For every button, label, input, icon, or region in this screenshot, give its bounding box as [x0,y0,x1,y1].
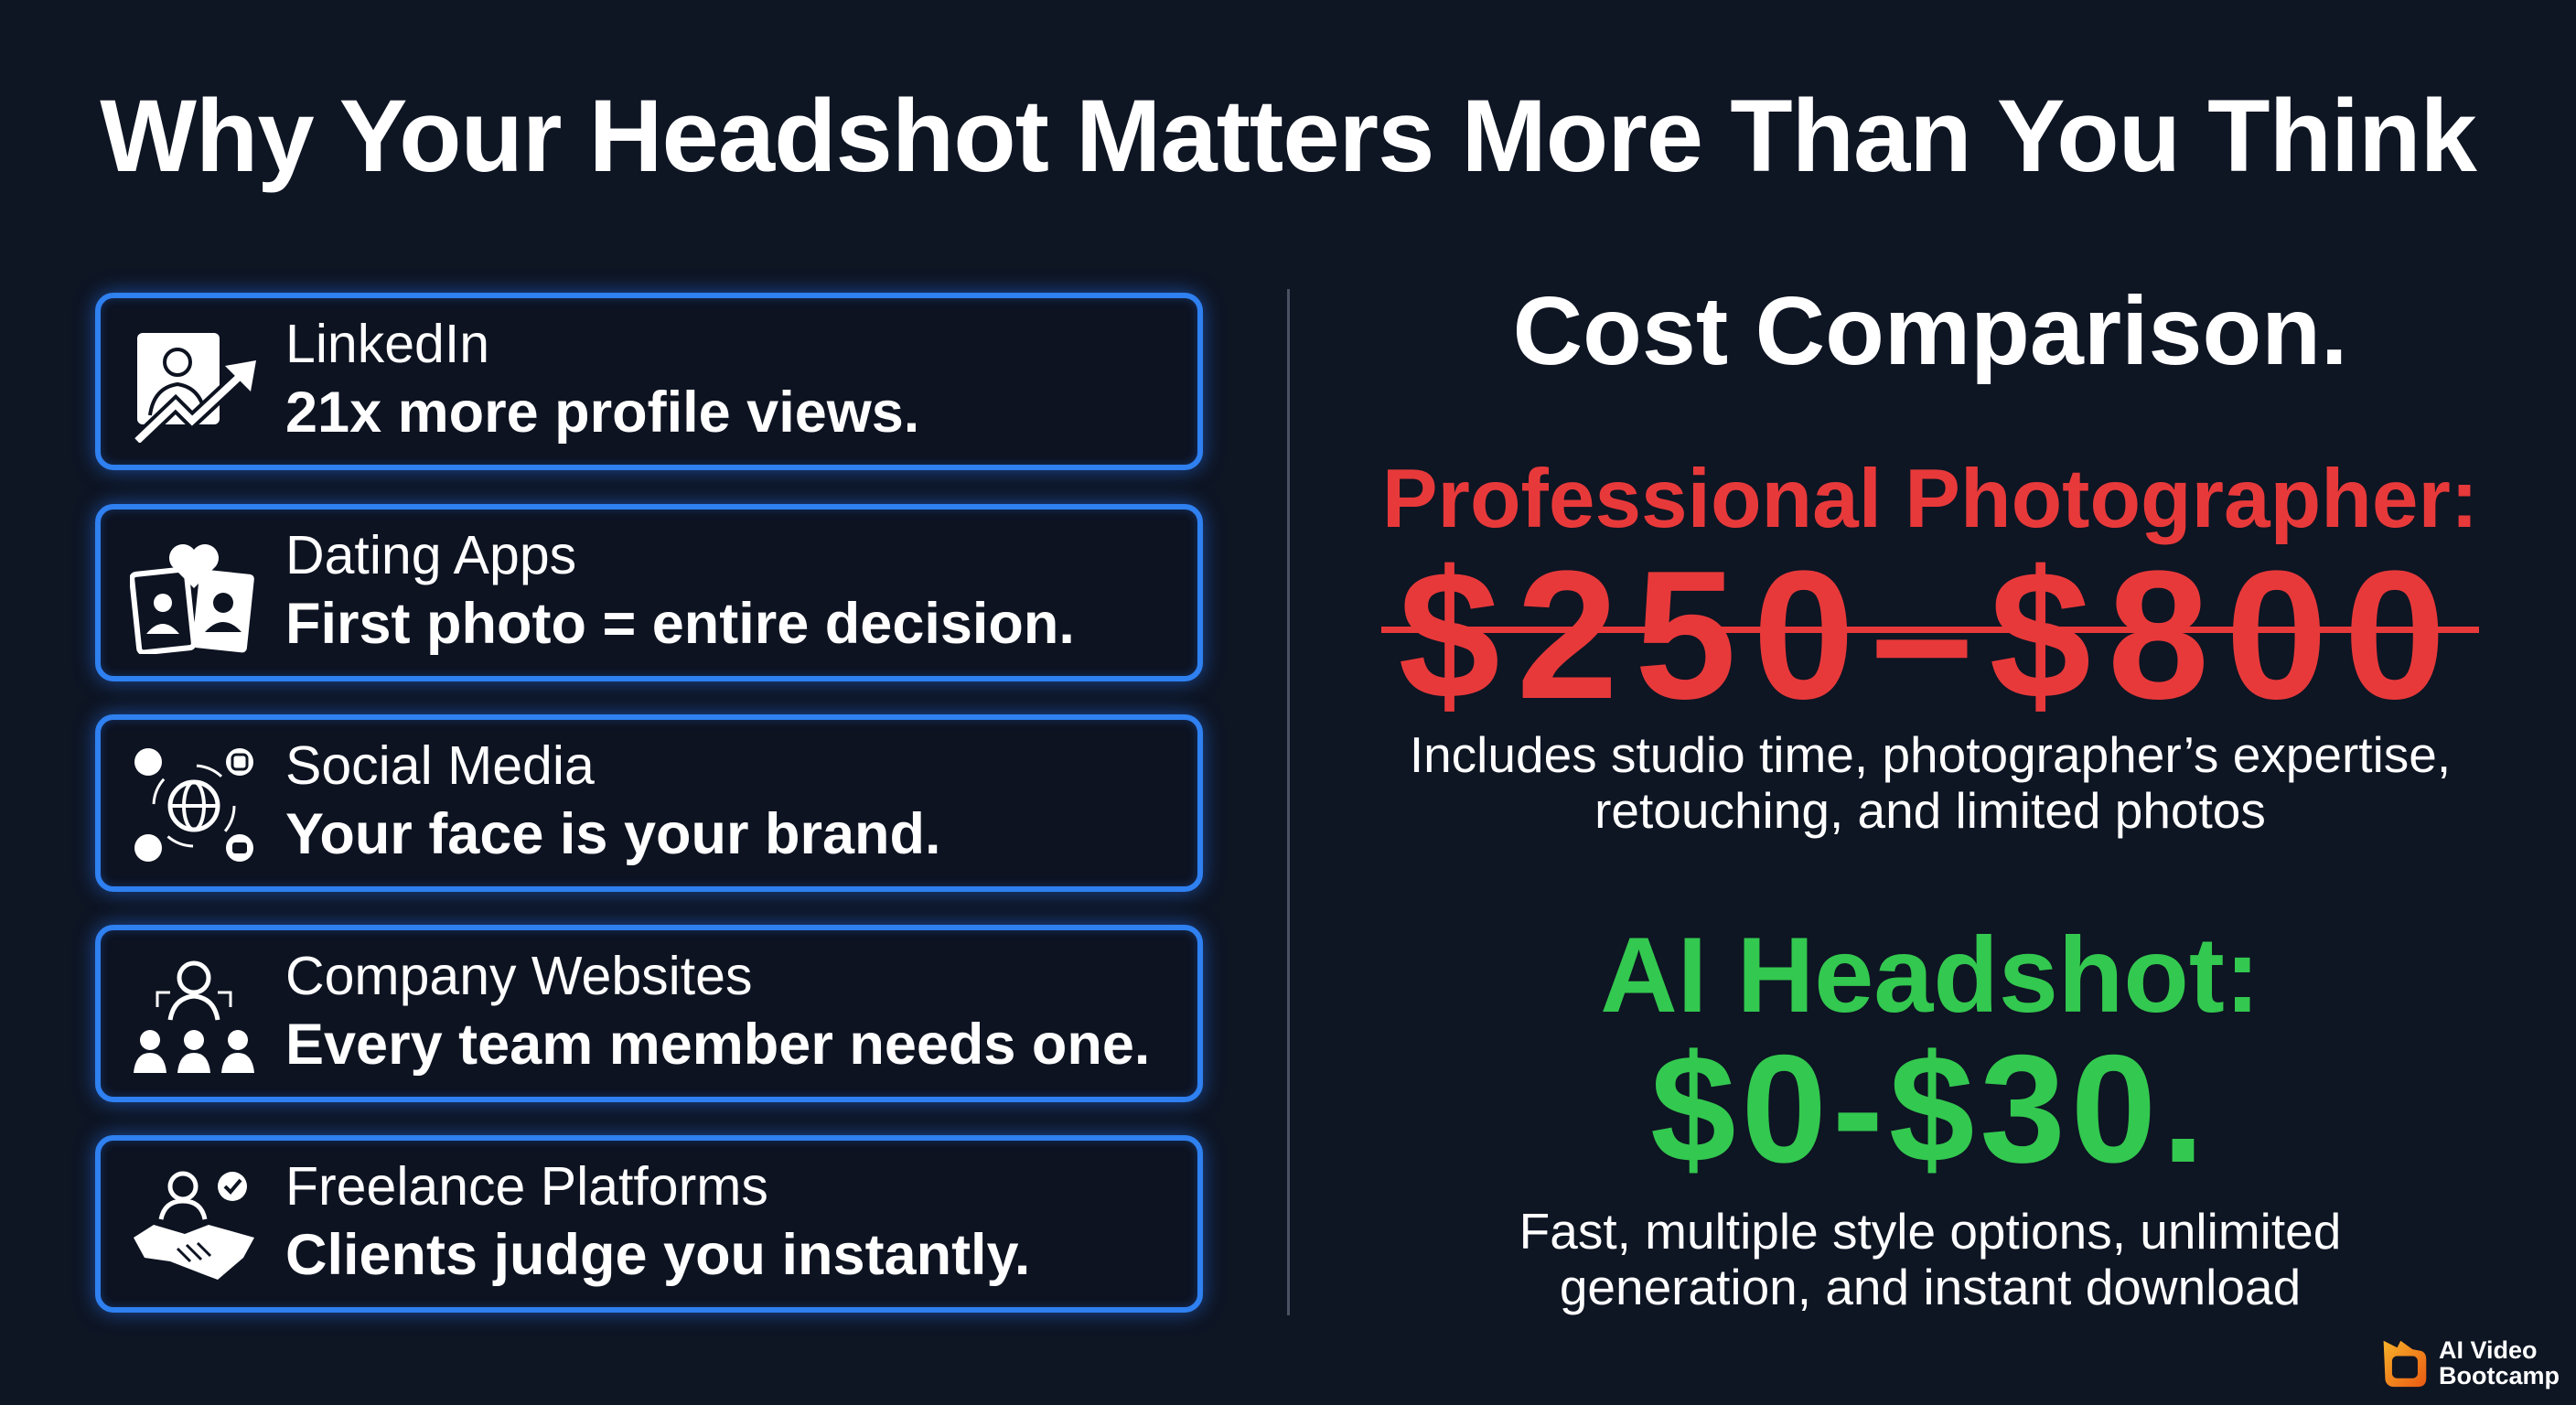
card: Freelance Platforms [95,1135,1203,1313]
card: LinkedIn: LinkedIn [285,314,489,374]
card: Dating Apps: First photo = entire decision. [285,592,1075,656]
price: struck through: $250–$800 [1398,533,2463,737]
icon: team [134,960,254,1073]
text: AI benefits: generation, and instant download [1560,1259,2301,1315]
text: AI benefits [1519,1203,2341,1315]
card: Dating Apps [95,504,1203,681]
text: photographer includes [1410,726,2451,839]
card: Dating Apps: Dating Apps [285,525,576,585]
text: photographer includes: Includes studio time, photographer’s expertise, [1410,726,2451,783]
heading: Cost Comparison: Cost Comparison. [1513,277,2347,385]
icon: globe with social icons [134,748,253,862]
heading: AI Headshot: AI Headshot: [1600,915,2260,1035]
card: LinkedIn: 21x more profile views. [285,381,919,445]
logo: AI Video Bootcamp: AI Video [2439,1336,2538,1364]
text: AI benefits: Fast, multiple style options, unlimited [1519,1203,2341,1260]
logo: AI Video Bootcamp [2384,1336,2560,1389]
card: Company Websites: Every team member needs one. [285,1013,1150,1077]
card: LinkedIn [95,293,1203,470]
card: Company Websites: Company Websites [285,946,752,1006]
card: Company Websites [95,925,1203,1102]
icon: profile with rising arrow [134,333,256,443]
icon: dating photos heart [130,544,254,654]
title: Why Your Headshot Matters More Than You Think [100,79,2476,193]
card: Social Media: Your face is your brand. [285,802,941,866]
heading: Professional Photographer: Professional Photographer: [1382,453,2478,545]
text: photographer includes: retouching, and limited photos [1594,782,2266,839]
card: Social Media: Social Media [285,735,595,796]
card: Freelance Platforms: Clients judge you instantly. [285,1223,1030,1287]
card: Freelance Platforms: Freelance Platforms [285,1156,768,1217]
card: Social Media [95,714,1203,892]
icon: handshake with check [134,1171,254,1280]
price: AI: $0-$30. [1650,1023,2210,1195]
logo: AI Video Bootcamp: Bootcamp [2439,1362,2560,1389]
